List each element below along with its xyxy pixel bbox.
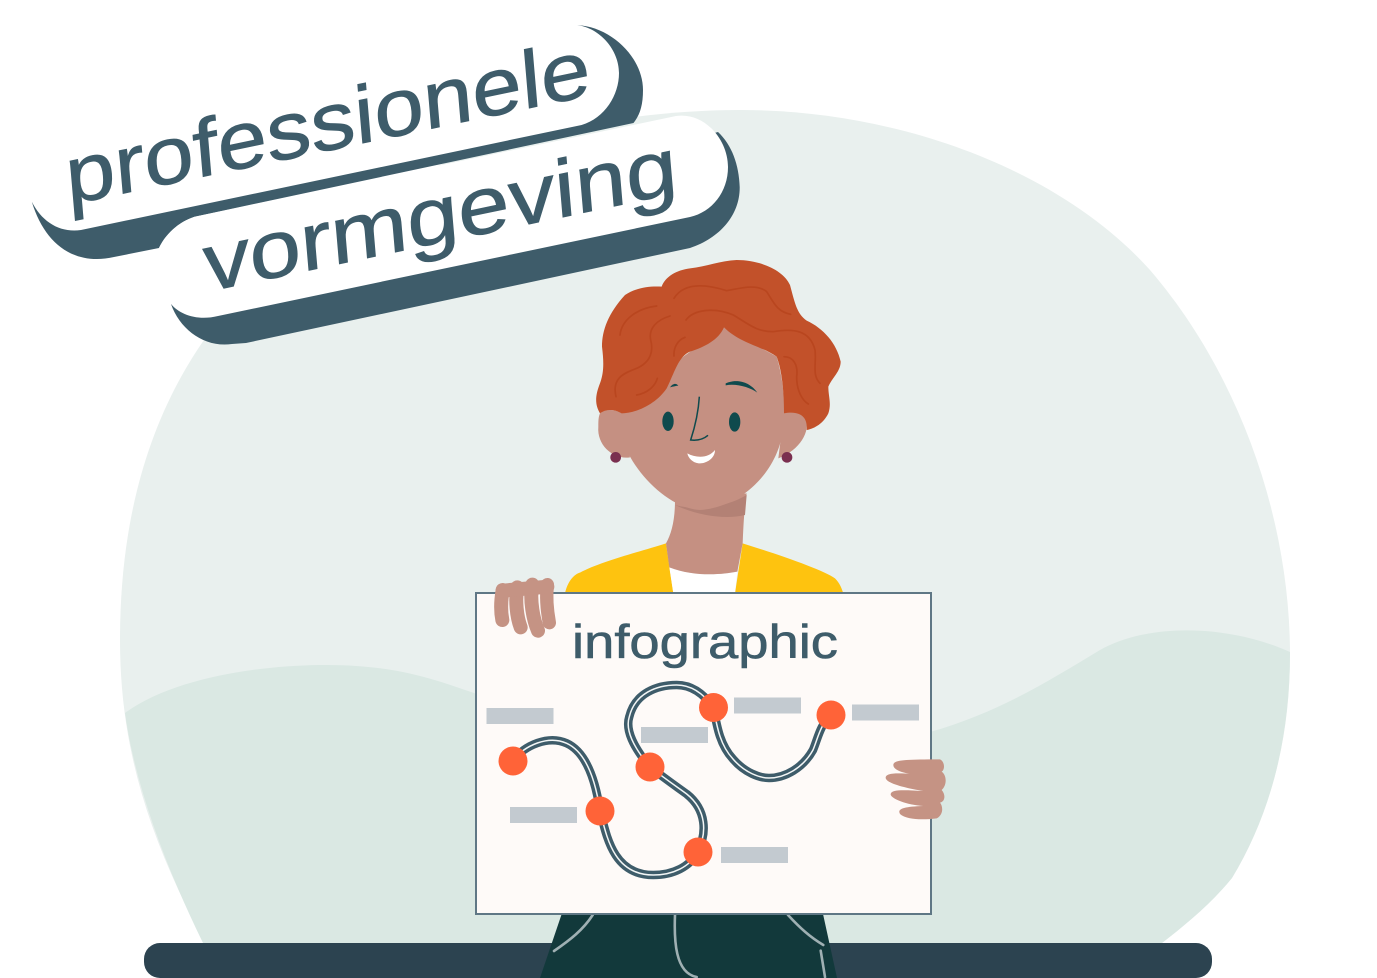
neck shadow <box>675 495 747 517</box>
title line 2: vormgeving <box>200 121 681 310</box>
jacket <box>565 543 843 593</box>
poster heading: infographic <box>572 615 838 668</box>
poster <box>476 593 931 914</box>
neck <box>666 493 747 574</box>
title line 1: professionele <box>62 23 594 223</box>
banner one shadow <box>32 25 643 259</box>
background blob <box>120 110 1290 943</box>
hair <box>596 260 841 430</box>
left eyebrow <box>670 384 678 387</box>
right hand <box>886 759 946 819</box>
left eye <box>662 412 674 431</box>
route line <box>513 685 831 875</box>
hair curls <box>615 286 820 404</box>
left ear <box>598 410 630 458</box>
right ear <box>778 411 807 458</box>
background hill left <box>125 665 700 943</box>
right eyebrow <box>726 381 757 393</box>
floor bar <box>144 943 1212 978</box>
poster board <box>476 593 931 914</box>
face <box>620 327 784 510</box>
banner two pill <box>158 116 728 318</box>
background hill right <box>700 630 1290 943</box>
banner two shadow <box>171 132 740 345</box>
earrings <box>610 452 792 463</box>
title banner <box>32 23 740 345</box>
trousers <box>540 914 837 978</box>
smile <box>687 450 715 463</box>
banner one pill <box>32 25 619 230</box>
person <box>565 260 843 593</box>
left hand <box>501 585 549 631</box>
nose <box>691 397 708 440</box>
label placeholders <box>486 698 919 863</box>
shirt <box>669 567 737 593</box>
route markers <box>498 693 846 866</box>
right eye <box>729 412 740 432</box>
